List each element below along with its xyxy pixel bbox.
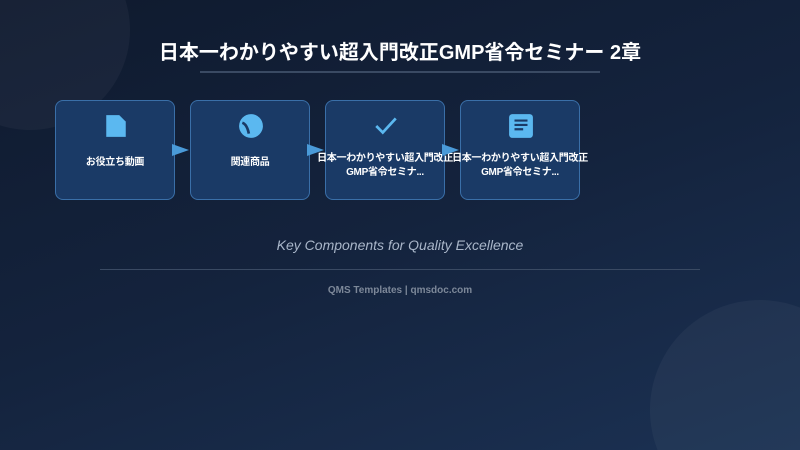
label: お役立ち動画	[86, 157, 144, 168]
label: GMP省令セミナ...	[346, 167, 424, 178]
icon: document	[509, 114, 533, 138]
arrow 3	[442, 144, 459, 156]
label: 関連商品	[231, 157, 269, 168]
label: 日本一わかりやすい超入門改正	[452, 153, 588, 164]
card: seminar 2	[460, 100, 580, 200]
footer: QMS Templates | qmsdoc.com	[328, 285, 472, 296]
arrow 1	[172, 144, 189, 156]
label	[317, 152, 453, 178]
icon: globe	[239, 114, 263, 138]
card: seminar 1	[325, 100, 445, 200]
card: products	[190, 100, 310, 200]
icon: check	[375, 118, 397, 134]
icon: file	[106, 115, 126, 137]
subtitle: Key Components for Quality Excellence	[277, 237, 523, 253]
card: videos	[55, 100, 175, 200]
arrow 2	[307, 144, 324, 156]
title: 日本一わかりやすい超入門改正GMP省令セミナー 2章	[159, 42, 641, 64]
label	[452, 152, 588, 178]
label: 日本一わかりやすい超入門改正	[317, 153, 453, 164]
label: GMP省令セミナ...	[481, 167, 559, 178]
